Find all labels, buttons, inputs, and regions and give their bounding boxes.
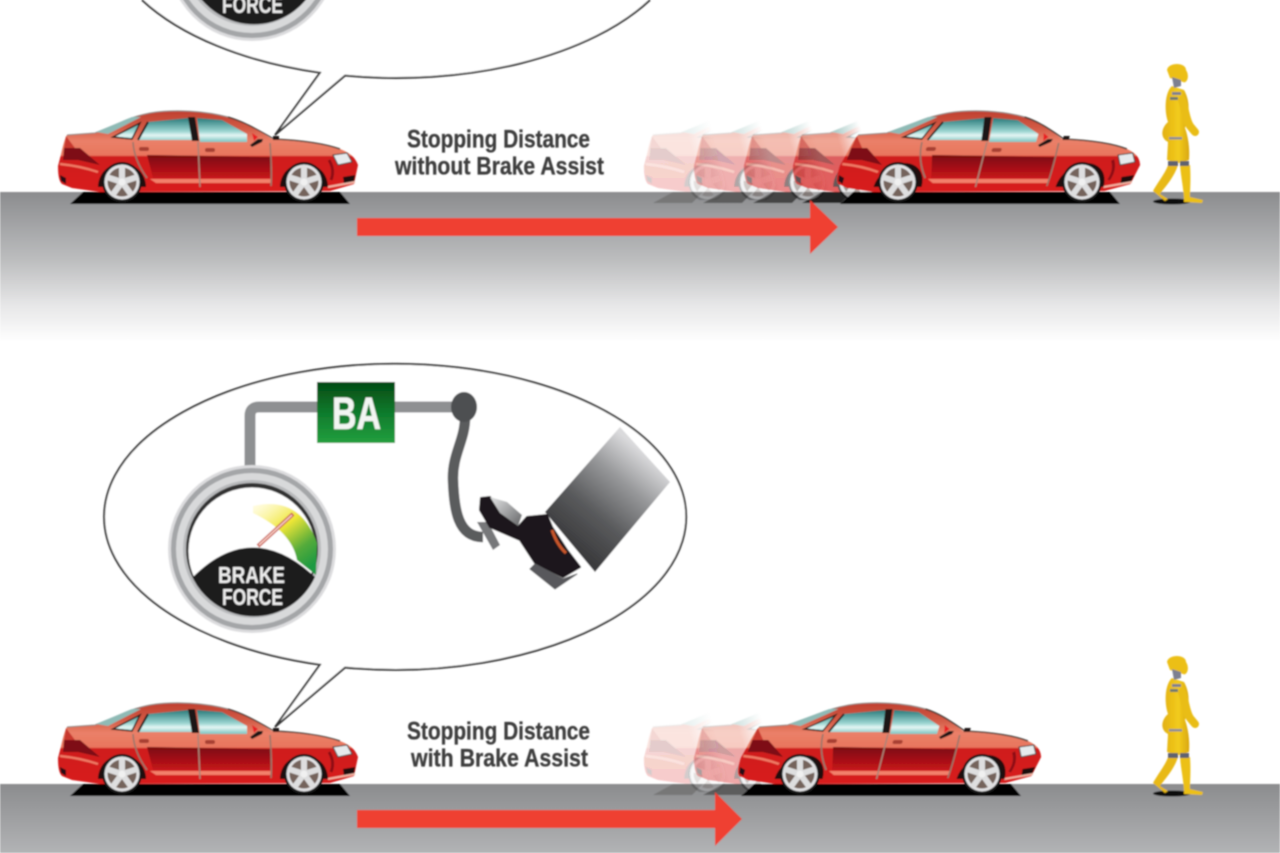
speech bubble: bottom scenario, with brake assist: [104, 364, 686, 727]
label: stopping distance without brake assist: [394, 126, 605, 180]
road: top scenario: [0, 192, 1280, 342]
leg and shoe pressing the pedal: [480, 427, 670, 589]
arrow: stopping distance without brake assist: [357, 200, 838, 254]
car: bottom scenario, stopped position: [733, 703, 1057, 796]
motion trail: bottom scenario: [644, 716, 773, 796]
brake force gauge: bottom: [168, 465, 336, 633]
BA module: BA: [332, 388, 381, 439]
label: stopping distance with brake assist: with Brake Assist: [410, 744, 589, 772]
car: top scenario, stopped position: [832, 111, 1156, 204]
motion trail: top scenario: [644, 122, 872, 204]
road: bottom scenario: [0, 784, 1280, 853]
brake force gauge: bottom: BRAKE: [218, 562, 285, 588]
speech bubble: top scenario, without brake assist: [142, 0, 650, 135]
label: stopping distance with brake assist: [407, 718, 590, 772]
brake pedal: [451, 392, 500, 550]
crash test dummy: top scenario: [1153, 64, 1203, 204]
label: stopping distance without brake assist: without Brake Assist: [394, 152, 605, 180]
brake force gauge: bottom: FORCE: [222, 584, 283, 610]
brake force gauge: top, cropped: [168, 0, 336, 41]
line from gauge to BA module: [250, 407, 460, 466]
arrow: stopping distance with brake assist: [357, 792, 742, 846]
car: bottom scenario, start position: [58, 703, 358, 796]
crash test dummy: bottom scenario: [1153, 656, 1203, 796]
label: stopping distance without brake assist: Stopping Distance: [407, 126, 590, 154]
car: top scenario, start position: [58, 111, 358, 204]
label: stopping distance with brake assist: Stopping Distance: [407, 718, 590, 746]
BA module: [317, 382, 395, 443]
